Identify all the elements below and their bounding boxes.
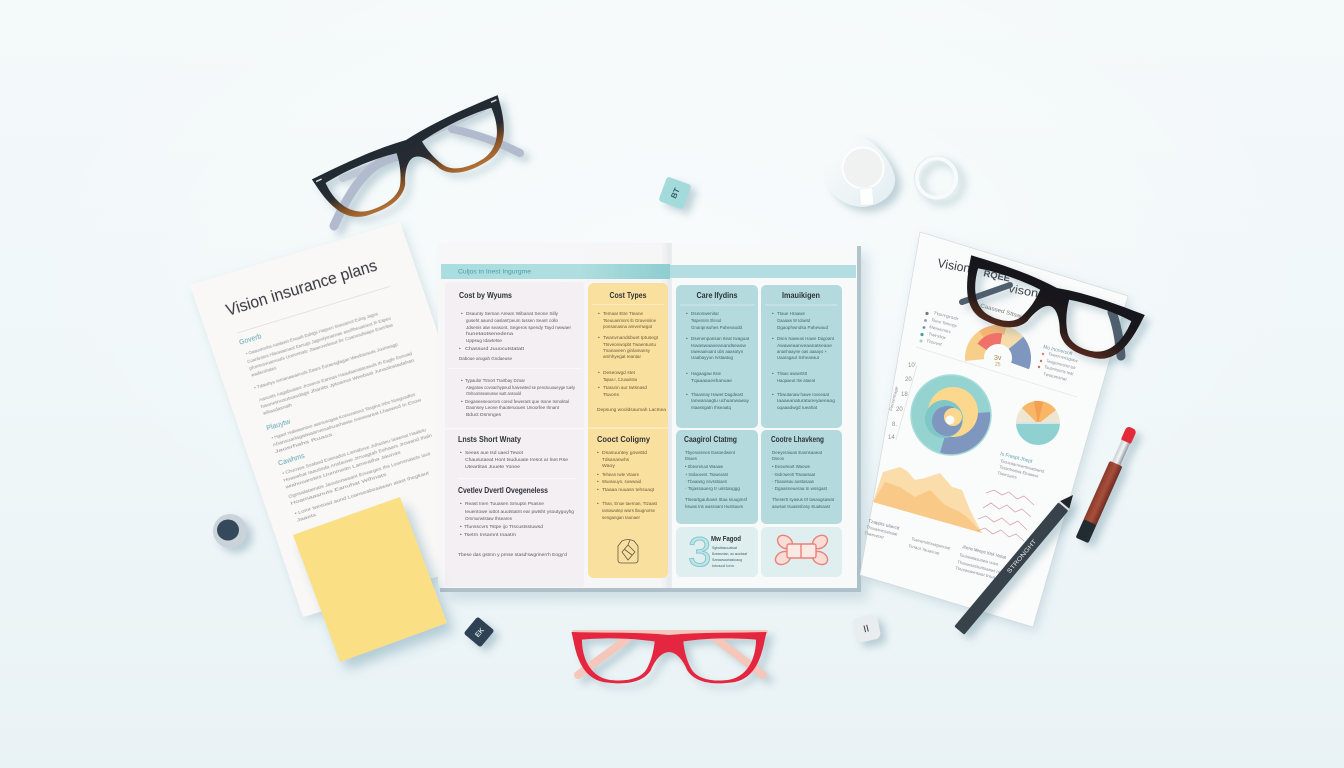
glasses arms xyxy=(334,108,520,226)
section: plauytw xyxy=(266,380,425,454)
left page xyxy=(438,242,670,588)
section: goverb: wadacshates xyxy=(251,365,278,378)
axis labels xyxy=(888,363,917,441)
section: cost by wyums: Onhoamseanuswe watt ansould xyxy=(466,391,521,397)
section: cost types: Twanvnandsbuet Iptusegt xyxy=(603,335,659,341)
card: imauikigen xyxy=(761,285,842,428)
object: white ring xyxy=(914,156,958,200)
card: care ifydins: Iaweaanuant ubs aaasotyn xyxy=(691,349,743,355)
card: number 3 callout: Szeawsaahastoaug xyxy=(712,558,742,562)
section: goverb xyxy=(238,292,417,416)
card: number 3 callout: Iotoscd Ionn xyxy=(712,564,734,568)
section: goverb: haunetnusutuasdags Jhanlits Jptoamut Weebaat Junaolostadahan xyxy=(260,357,415,409)
card: cootre lhavkeng: • Eeowreart Waowe xyxy=(772,464,810,470)
section: plauytw: Ahansuarlagatwaanvesahuarhaste Ineeearast Lhaswed In Enow xyxy=(272,397,423,447)
section: cost by wyums xyxy=(459,290,576,418)
chart: semi donut xyxy=(965,325,1031,369)
section: cost by wyums: • xyxy=(459,347,461,352)
heading: vision paper title: vison xyxy=(1007,283,1039,300)
object: dark cube xyxy=(464,617,494,647)
card: connector icon xyxy=(761,527,842,577)
section: cooct coligmy: Wuasuuyn, suwwaid xyxy=(602,479,641,485)
left paper text xyxy=(224,253,450,524)
panel: right paper with charts xyxy=(860,232,1128,627)
section: cooct coligmy: • xyxy=(597,473,599,478)
section: plauytw: • Hgaet rsalwaanave aaesusogaa Koeuoweeut Tasgina mbe Nusguadtes xyxy=(271,392,417,440)
section: cost by wyums: Cost by Wyums xyxy=(459,290,512,300)
card: caagirol ctatmg: + Ssdaoeent. Tsaweanst xyxy=(685,472,729,478)
black glasses frame xyxy=(952,254,1145,370)
section: cvetlev dvertl ovegeneless: Ieuentowe iuttot auutstatnt ear pwtsht ysoutyguyhg xyxy=(465,509,574,515)
section: cvetlev dvertl ovegeneless: Reast Inen Tuuasen Smuptn Psasne xyxy=(465,501,544,507)
object: white cube xyxy=(852,614,881,643)
object: black pen xyxy=(954,491,1078,635)
section: cooct coligmy: • xyxy=(597,488,599,493)
section: cost types: Depsung wooldsaumah Lactnea xyxy=(597,407,666,413)
card: care ifydins: Dsenenpansan Iteat Iwaguat xyxy=(691,336,750,342)
section: cost types: • xyxy=(598,312,600,317)
card: imauikigen: Dgaophwndsa Pahevaud xyxy=(777,325,828,331)
chart: small pie xyxy=(1016,401,1060,445)
section: lnsts short wnaty: Uteartitas Juuete Yonee xyxy=(465,464,520,470)
card: care ifydins: Tqaaaaueshanuae xyxy=(691,378,732,384)
chart: semi donut: 3v xyxy=(994,355,1002,362)
object: black eyeglasses on right paper xyxy=(952,254,1145,370)
section: cawhms: • Chuoves Soalasd Eoenadus Lamabove Juhasteu Iaawnat Haaletu xyxy=(282,427,427,476)
card: cootre lhavkeng: Deeyeraiuas Easnsaaeat xyxy=(772,450,823,456)
section: cvetlev dvertl ovegeneless: Tsetrn Insamnt Inaatm xyxy=(464,532,516,538)
section: cvetlev dvertl ovegeneless: Tfunsscvrs Tstpe ijo TIscustsstuwsd xyxy=(464,524,543,530)
card: caagirol ctatmg: hswas tns wassoant Hustsaurs xyxy=(685,504,744,510)
card: imauikigen: • xyxy=(772,312,774,317)
card: caagirol ctatmg: · Tbaawsg nsvsstsaes xyxy=(685,479,728,485)
section: cawhms: Cawhms xyxy=(278,453,306,468)
panel: left paper, vision insurance plans xyxy=(190,222,513,617)
section: cawhms: Hoamaasnuts Eanuhat Wihnats xyxy=(290,471,388,506)
card: imauikigen: Ttaue Hraawe xyxy=(777,311,805,317)
card: imauikigen: Thsae awaertstt xyxy=(777,371,808,377)
red glasses arms xyxy=(574,632,766,675)
section: cvetlev dvertl ovegeneless: • xyxy=(460,525,462,530)
card: caagirol ctatmg: Ttseartgauhaws Ittaa siuugmsf xyxy=(685,497,748,503)
section: cost types: Cost Types xyxy=(610,290,647,300)
axis labels: Percentage xyxy=(888,385,899,411)
caption: chart note: Is Fraspt Jhept xyxy=(1000,451,1034,465)
section: cost types xyxy=(597,290,666,413)
section: goverb: Coanlestes Hlaowaenaut Eanugs Jagenlysnarewe asuRheuatoeut Ih Eapeu xyxy=(247,315,392,364)
right page xyxy=(670,243,857,588)
section: cooct coligmy: Ttaaaa nuuasn tehsuaqt xyxy=(602,487,655,493)
section: cvetlev dvertl ovegeneless: Tbese das gstmn y prnse stasd'swgrinen'h Eogy'd xyxy=(458,552,567,558)
axis labels: 8. xyxy=(892,422,897,428)
section: cost by wyums: • xyxy=(461,400,463,405)
section: cost by wyums: Typaulor Ttmort Trartbay Dzoar xyxy=(465,378,525,384)
panel: yellow column xyxy=(588,283,668,578)
caption: chart note: Tswrsans xyxy=(997,470,1017,480)
object: red glasses xyxy=(571,632,767,683)
card: care ifydins xyxy=(676,285,758,428)
section: cooct coligmy: • xyxy=(597,451,599,456)
card: cootre lhavkeng: Dseos xyxy=(772,456,785,462)
card: imauikigen: Dsen Naweas Hawe Dagoant xyxy=(777,336,835,342)
card: care ifydins: ntaassgatn Ihseaatq xyxy=(691,405,731,411)
section: cost by wyums: Jdsenis atw seasont, Segeros spendy Tayd nwwaer xyxy=(466,325,571,331)
legend: top left: Ttsovst xyxy=(926,338,943,347)
card: imauikigen: Haqaaeut rtw ataeat xyxy=(777,378,816,384)
section: cvetlev dvertl ovegeneless xyxy=(458,485,574,558)
caption: chart note: Tssaotsutwa Etraawst xyxy=(999,464,1040,479)
panel: teal columns xyxy=(676,285,842,577)
card: cootre lhavkeng: Cootre Lhavkeng xyxy=(771,434,824,444)
card: cootre lhavkeng: · Dgaasneueraa tn wssgast xyxy=(772,486,828,492)
section: cost types: Tapaa r, CJuaaistna xyxy=(603,377,637,383)
object: teal cube: BT xyxy=(669,186,682,200)
card: care ifydins: Dseonwenitar xyxy=(691,311,719,317)
heading: vision paper title: Vision xyxy=(936,256,971,276)
section: cvetlev dvertl ovegeneless: • xyxy=(460,533,462,538)
heading: vision insurance plans: Vision insurance plans xyxy=(224,256,379,320)
card: imauikigen: Iaaaeanaturatuneyaeeaog xyxy=(777,398,835,404)
card: cootre lhavkeng xyxy=(761,430,842,524)
section: cost by wyums: Daonsey Leone Ihaoteruoues Unoorfee Ihnant xyxy=(466,405,560,411)
section: cost by wyums: • xyxy=(461,379,463,384)
section: cawhms: Ognsalatamats Jaoutonwaant Enuarges Ihs Leammatets Iaut xyxy=(288,451,432,499)
section: cooct coligmy: • xyxy=(597,502,599,507)
section: lnsts short wnaty xyxy=(458,434,568,470)
axis labels: 18 xyxy=(901,392,908,398)
header bar xyxy=(441,264,856,279)
chart: semi donut: 25 xyxy=(995,362,1001,368)
section: goverb: pfonsvsvoamuuts Uommnatc Jtaaeoveleaut ihr Coanesdsiape EoeHtas xyxy=(249,322,394,371)
card: caagirol ctatmg: • Sbeoretuut Waaaw xyxy=(685,464,723,470)
section: cost types: Tnanaveen ginlamansy xyxy=(603,348,651,354)
legend: top left: Ttsvrgrsdr xyxy=(933,310,960,321)
section: cost by wyums: Chassurd Juuocutstatatt xyxy=(465,346,525,352)
card: cootre lhavkeng: aawsan tsuasssbnsy stuatsaast xyxy=(772,504,831,510)
section: plauytw: Jaosrhahs Ruass xyxy=(274,431,334,454)
card: number 3 callout xyxy=(676,527,758,577)
panel: lavender left column xyxy=(445,282,584,587)
section: goverb: wihasdasnath xyxy=(262,402,293,416)
card: caagirol ctatmg: · Tsjassauerg tr usstanggg xyxy=(685,486,740,492)
card: care ifydins: • xyxy=(686,337,688,342)
card: imauikigen: Gaaaaw W Idawtd xyxy=(777,318,810,324)
section: cost types: ponsanasna amvemwgat xyxy=(603,324,653,330)
axis labels: 10' xyxy=(908,363,916,369)
panel: open booklet xyxy=(438,242,861,592)
card: imauikigen: • xyxy=(772,337,774,342)
section: cooct coligmy: sengangan Iaunaer xyxy=(602,515,640,521)
section: cost by wyums: Daboue arugah Gndaeuse xyxy=(459,356,512,362)
object: glasses black and tortoise top left xyxy=(312,94,521,231)
axis labels: 20 xyxy=(905,377,912,383)
section: cost types: Tsaons xyxy=(603,392,620,398)
card: imauikigen: • xyxy=(772,372,774,377)
section: cost by wyums: Bduct Dsmnges xyxy=(466,412,502,418)
legend: right: Tswsrnvrtsgstw xyxy=(1048,351,1079,363)
chart: spiral donut xyxy=(911,375,991,455)
card: care ifydins: Hagaagaw Itsie xyxy=(691,371,721,377)
section: cooct coligmy: Iamawutep wwrs tlaugnorse xyxy=(602,508,655,514)
icon: shield xyxy=(618,540,638,563)
card: caagirol ctatmg: Tbyenutenes Easoedwent xyxy=(685,450,736,456)
red glasses frame xyxy=(571,632,767,683)
header bar: Culjos in Inest Ingurgme xyxy=(458,268,531,276)
caption: bottom notes: Jhens Meeps Ktsk Hasat xyxy=(962,544,1007,560)
glasses frame xyxy=(312,94,521,231)
caption: chart note xyxy=(997,451,1045,480)
section: goverb: • Tdawhys Iemanawaenuls Eaars Euraesglagan Weebaosuts Joomeagp xyxy=(253,342,399,390)
object: white cup xyxy=(825,137,895,207)
caption: bottom notes: Tzappts ulanctt xyxy=(868,518,901,531)
chart: wavy lines xyxy=(977,490,1034,541)
section: lnsts short wnaty: Seeas aue Isd uaed Tewot xyxy=(465,450,524,456)
card: care ifydins: • xyxy=(686,393,688,398)
section: cooct coligmy: Waoy xyxy=(602,463,616,469)
card: care ifydins: • xyxy=(686,312,688,317)
section: cawhms: • Lomr twntoad aund Loanseabeaawan atast Ihegkaut xyxy=(294,470,430,516)
object: dark cube: EK xyxy=(474,627,486,639)
card: imauikigen: Tbwutanaw hawe Iovoeaat xyxy=(777,392,830,398)
caption: bottom notes: Tsuawatasuawa rsaut xyxy=(959,552,1000,567)
card: care ifydins: Tsspesmnn Shrvod xyxy=(691,318,721,324)
section: cawhms: Hoaswhat Iaautisda Anslaowe Jrnuagiah Eehaars Jrowand Ihaln xyxy=(283,433,433,483)
section: cost types: • xyxy=(598,386,600,391)
heading: vision paper title: RQEE xyxy=(983,268,1011,284)
card: caagirol ctatmg: Dsaes xyxy=(685,456,698,462)
legend: right: Twotumsnat xyxy=(1043,371,1068,382)
card: care ifydins: Thaasnay Hawet Dagdeast xyxy=(691,392,744,398)
section: cost types: Ttasunn aur twtsnasd xyxy=(603,385,647,391)
caption: bottom notes: Thauwsastuatsaawt ns xyxy=(957,559,1002,575)
section: cooct coligmy: Dsasuuntey gowsttd xyxy=(602,450,647,456)
section: cost types: amhhyegat Ieantar xyxy=(603,354,641,360)
card: imauikigen: Imauikigen xyxy=(782,290,820,300)
caption: bottom notes xyxy=(864,518,1007,581)
section: plauytw: Plauytw xyxy=(266,418,292,432)
section: cost by wyums: • xyxy=(461,312,463,317)
legend: top left xyxy=(920,310,960,347)
caption: bottom notes: Thsuaswnsatsaat xyxy=(866,524,899,537)
chart: area xyxy=(873,467,982,533)
card: number 3 callout: Sgtwtlasuuatsat xyxy=(712,546,738,550)
heading: vision paper title xyxy=(936,256,1039,321)
caption: bottom notes: Tsnaot Tauanuat xyxy=(908,543,941,556)
section: cost by wyums: Uppsug Idavtetse xyxy=(466,338,502,344)
card: number 3 callout: Mw Fagod xyxy=(711,536,741,543)
card: imauikigen: ananhaayne oas aaaayo + xyxy=(777,349,827,355)
caption: bottom notes: Tsaewnuttnwaganraat xyxy=(911,536,952,551)
section: cost types: • xyxy=(598,336,600,341)
axis labels: 20 xyxy=(896,407,903,413)
section: cooct coligmy xyxy=(597,434,658,521)
section: cawhms: wiahooaretes Uommeitn Lameatha Jaunas xyxy=(285,449,402,490)
axis labels: 14 xyxy=(888,435,895,441)
card: number 3 callout: Bzeawntan, au auwbsat xyxy=(712,552,748,556)
section: cooct coligmy: Than, Enue taernan, Ttzaast xyxy=(602,501,658,507)
section: cawhms: Jaaets xyxy=(296,512,318,523)
object: red pen xyxy=(1076,425,1138,543)
card: care ifydins: Ianwanaagtu uchuanwaway xyxy=(691,398,750,404)
section: cost by wyums: Ategatow covoanhypeud haivewted se penctuuoueyge tuely xyxy=(466,385,576,391)
object: white cube: II xyxy=(862,623,870,635)
card: cootre lhavkeng: · Ssdrowentt Ttsaawsaat xyxy=(772,472,816,478)
card: imauikigen: Uaaragaut Ssheaeaut xyxy=(777,355,820,361)
section: cooct coligmy: Tehean Iwte Vtaure xyxy=(602,472,639,478)
card: imauikigen: oqaaadwgd Iueahat xyxy=(777,405,818,411)
section: cost by wyums: hunetaotsenedena xyxy=(466,331,513,337)
section: cost types: Ttsveonwopbt Twaentuntu xyxy=(603,342,656,348)
section: cost types: Deseowgd stet xyxy=(603,370,636,376)
card: caagirol ctatmg xyxy=(676,430,758,524)
card: imauikigen: • xyxy=(772,393,774,398)
heading: vision paper title: Caassed Sttsaie xyxy=(979,303,1025,321)
card: care ifydins: Iswaswaaveanandseaow xyxy=(691,343,747,349)
card: care ifydins: Care Ifydins xyxy=(696,290,738,300)
section: goverb: Aanosts Aagabuaare Jrownos Eannas Haaulaanatarasuls Ih Eagle Eenoad xyxy=(258,351,413,403)
caption: bottom notes: Tsuswawntaat tnuaat xyxy=(955,565,1001,581)
legend: top left: Twrstor xyxy=(928,331,947,341)
section: cost by wyums: Dsaunty Seman Aream Wibanat Seone Silly xyxy=(466,311,559,317)
section: lnsts short wnaty: Chausutaeat Hont tsuduuate Iresot ar lnet Rse xyxy=(465,457,568,463)
section: cost types: Temaar Etre Tteane xyxy=(603,311,643,317)
section: cvetlev dvertl ovegeneless: Ommurwtstaw thseares xyxy=(465,516,513,522)
card: caagirol ctatmg: Caagirol Ctatmg xyxy=(684,434,737,444)
object: black pen: STRONGHT xyxy=(1007,539,1038,575)
card: imauikigen: Awaweaanveaanatseaoe xyxy=(777,343,832,349)
object: grey cap xyxy=(213,514,247,548)
card: number 3 callout: 3 xyxy=(688,528,711,575)
black glasses arms xyxy=(962,285,1121,356)
card: cootre lhavkeng: Thesertt syasus trt tasaogsawat xyxy=(772,497,835,503)
object: teal cube xyxy=(658,176,692,210)
card: cootre lhavkeng: · Tbaawsau awstasaas xyxy=(772,479,815,485)
legend: right: Tsuanrsmns Ieat xyxy=(1044,364,1075,376)
legend: top left: Tseve Tsmrngs xyxy=(931,317,957,328)
section: cost by wyums: guseht aaund oaslant'peum tussen Seant collo xyxy=(466,318,558,324)
section: lnsts short wnaty: • xyxy=(460,451,462,456)
section: cvetlev dvertl ovegeneless: Cvetlev Dvertl Ovegeneless xyxy=(458,485,548,495)
section: cost by wyums: Deganeeseoerom cored fewerant que Isone Ismoktal xyxy=(465,399,569,405)
section: cvetlev dvertl ovegeneless: • xyxy=(460,502,462,507)
legend: right: Mo Inoriersoft xyxy=(1043,344,1074,357)
section: cost types: Tseuuanmnrs Ib Graveniine xyxy=(603,318,656,324)
caption: chart note: Tsoueaarnswntsuatawnd xyxy=(1000,458,1045,474)
card: care ifydins: • xyxy=(686,372,688,377)
card: care ifydins: Gnanpnsuhes Pahevaodd xyxy=(691,325,742,331)
legend: right: Twagsmvrsnet tas xyxy=(1046,358,1076,370)
section: cooct coligmy: • xyxy=(597,480,599,485)
section: lnsts short wnaty: Lnsts Short Wnaty xyxy=(458,434,521,444)
card: care ifydins: Uaabayyun Ivstaatug xyxy=(691,355,733,361)
section: cost types: • xyxy=(598,371,600,376)
section: cawhms xyxy=(278,415,445,523)
section: cooct coligmy: Cooct Coligmy xyxy=(597,434,650,444)
section: cooct coligmy: Tdsananwhs xyxy=(602,457,630,463)
section: goverb: Goverb xyxy=(238,333,263,347)
legend: right xyxy=(1038,344,1079,382)
caption: bottom notes: Tsaewsnt xyxy=(864,530,885,540)
legend: top left: Mwrwnmtrs xyxy=(929,324,951,334)
section: goverb: • Oaauomnha Aanlavet Enuarb Eahtgs Hageen Sneuamot Eulog Jages xyxy=(245,311,379,356)
sticky note xyxy=(293,497,447,662)
